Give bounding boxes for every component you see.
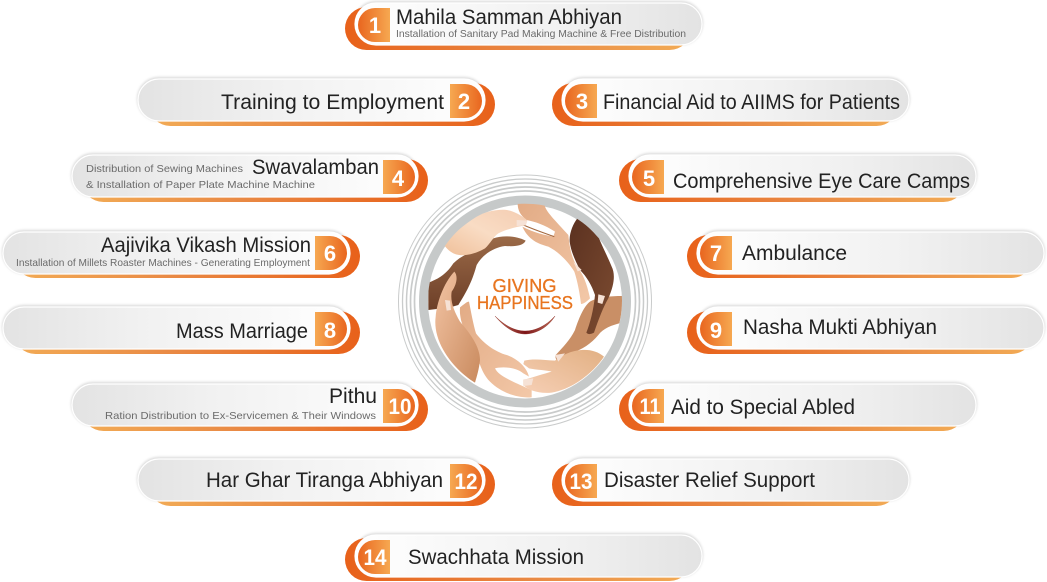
item 11: Aid to Special Abled: 11: [640, 394, 660, 419]
item 1: Mahila Samman Abhiyan: 1: [369, 13, 381, 38]
item 4: Swavalamban: Swavalamban: [252, 156, 379, 179]
item 1: Mahila Samman Abhiyan: Installation of Sanitary Pad Making Machine & Free Distribution: [396, 28, 686, 40]
item 8: Mass Marriage: [2, 305, 360, 354]
concentric rings: [398, 175, 652, 428]
item 12: Har Ghar Tiranga Abhiyan: Har Ghar Tiranga Abhiyan: [206, 469, 443, 492]
heading: Giving Happiness: HAPPINESS: [477, 293, 573, 313]
item 10: Pithu: 10: [388, 394, 412, 419]
item 13: Disaster Relief Support: 13: [570, 469, 592, 494]
item 2: Training to Employment: 2: [458, 89, 470, 114]
item 7: Ambulance: [687, 230, 1045, 278]
smile: [495, 316, 555, 334]
item 9: Nasha Mukti Abhiyan: 9: [710, 318, 722, 343]
item 6: Aajivika Vikash Mission: Aajivika Vikash Mission: [101, 234, 311, 257]
item 11: Aid to Special Abled: Aid to Special Abled: [671, 396, 855, 419]
item 1: Mahila Samman Abhiyan: [345, 1, 703, 50]
item 5: Comprehensive Eye Care Camps: 5: [643, 166, 655, 191]
item 2: Training to Employment: [137, 77, 495, 126]
item 9: Nasha Mukti Abhiyan: [687, 305, 1045, 354]
heading: Giving Happiness: [477, 276, 573, 313]
item 2: Training to Employment: Training to Employment: [221, 91, 444, 114]
item 6: Aajivika Vikash Mission: Installation of Millets Roaster Machines - Generating Employment: [16, 257, 310, 269]
item 9: Nasha Mukti Abhiyan: Nasha Mukti Abhiyan: [743, 316, 937, 339]
item 14: Swachhata Mission: 14: [364, 545, 387, 570]
item 14: Swachhata Mission: Swachhata Mission: [408, 546, 584, 569]
item 4: Swavalamban: [71, 153, 428, 202]
circle of hands: [428, 203, 622, 397]
item 8: Mass Marriage: Mass Marriage: [176, 320, 308, 343]
item 10: Pithu: [71, 382, 428, 431]
item 13: Disaster Relief Support: Disaster Relief Support: [604, 469, 815, 492]
item 14: Swachhata Mission: [345, 533, 703, 581]
item 8: Mass Marriage: 8: [324, 318, 336, 343]
item 3: Financial Aid to AIIMS for Patients: [552, 77, 910, 126]
item 3: Financial Aid to AIIMS for Patients: 3: [576, 89, 588, 114]
item 6: Aajivika Vikash Mission: 6: [324, 241, 336, 266]
item 13: Disaster Relief Support: [552, 457, 910, 506]
item 5: Comprehensive Eye Care Camps: [619, 153, 977, 202]
item 1: Mahila Samman Abhiyan: Mahila Samman Abhiyan: [396, 6, 622, 29]
item 7: Ambulance: Ambulance: [742, 242, 847, 265]
item 12: Har Ghar Tiranga Abhiyan: 12: [454, 469, 478, 494]
item 12: Har Ghar Tiranga Abhiyan: [137, 457, 495, 506]
item 10: Pithu: Pithu: [329, 385, 377, 408]
central emblem: concentric rings with circle of hands: [398, 175, 652, 428]
item 7: Ambulance: 7: [710, 241, 722, 266]
item 5: Comprehensive Eye Care Camps: Comprehensive Eye Care Camps: [673, 170, 970, 193]
item 10: Pithu: Ration Distribution to Ex-Servicemen & Their Windows: [105, 410, 376, 422]
item 4: Swavalamban: 4: [392, 166, 405, 191]
item 6: Aajivika Vikash Mission: [2, 230, 360, 278]
item 4: Swavalamban: Distribution of Sewing Machines: [86, 163, 243, 175]
item 11: Aid to Special Abled: [619, 382, 977, 431]
heading: Giving Happiness: GIVING: [492, 276, 556, 296]
item 4: Swavalamban: & Installation of Paper Plate Machine Machine: [86, 179, 315, 191]
item 3: Financial Aid to AIIMS for Patients: Financial Aid to AIIMS for Patients: [603, 91, 900, 114]
